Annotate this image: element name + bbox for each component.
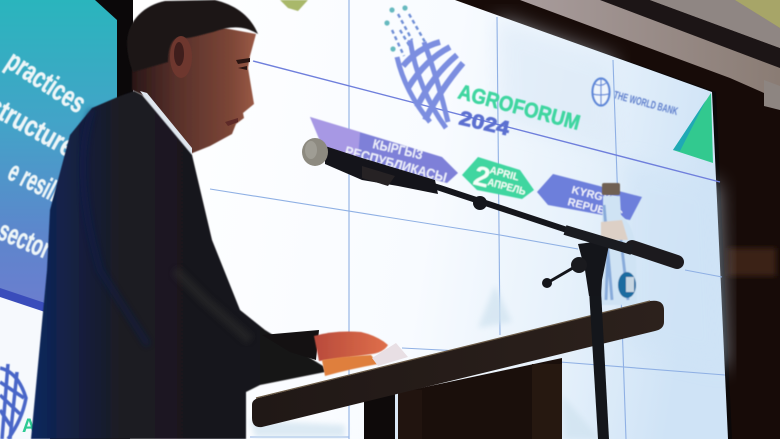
man: suit: [31, 91, 325, 439]
icon: agroforum wheat logo: [384, 5, 463, 128]
microphone on stand: [302, 138, 677, 439]
main projection screen: [130, 0, 728, 439]
faint artwork on lower screen: [250, 285, 600, 439]
icon: top logo fragment: [280, 0, 308, 11]
banner: kyrgyz republic: [537, 174, 642, 222]
banner: green date badge: [462, 157, 534, 199]
banner: green date badge: 2: [471, 160, 493, 194]
lectern: [252, 301, 664, 439]
man: far sleeve: [262, 330, 319, 360]
text: left screen copy: e resili: [3, 156, 65, 208]
left screen: [0, 0, 133, 439]
screen grid lines: [210, 0, 725, 439]
man: eye and mouth: [225, 58, 250, 126]
man: hair: [127, 0, 258, 72]
icon: green corner triangle: [673, 93, 713, 163]
water bottle: [600, 183, 637, 305]
banner: green date badge: APRIL: [488, 164, 521, 184]
mic: handle: [632, 247, 677, 262]
banner: kyrgyz respublikasy: КЫРГЫЗ: [371, 136, 424, 162]
banner: green date badge: АПРЕЛЬ: [486, 176, 527, 198]
mic: windscreen: [302, 138, 328, 166]
text: left screen copy: [0, 45, 91, 266]
person: [31, 0, 408, 439]
banner: kyrgyz republic: KYRGYZ: [570, 184, 618, 207]
text: left screen copy: practices: [0, 45, 91, 120]
text: AGROFORUM 2024: AGROFORUM: [456, 81, 582, 135]
icon: logo on left screen: [0, 364, 26, 439]
mic: tension knob: [542, 257, 587, 288]
mic: stand clamp: [578, 240, 610, 296]
mic: stand pole: [589, 290, 609, 439]
left screen: A: [22, 416, 36, 437]
mic: shaft: [322, 153, 632, 248]
icon: world bank logo: THE WORLD BANK: [612, 89, 679, 118]
man: ear: [170, 36, 192, 78]
man: near hand: [322, 355, 378, 376]
banner: kyrgyz republic: REPUBLIC: [566, 196, 624, 222]
icon: world bank logo: [592, 78, 679, 118]
mic: body: [325, 146, 438, 194]
lectern: front body: [364, 358, 562, 439]
lectern: slanted top: [252, 301, 664, 427]
man: neck and face: [132, 18, 256, 154]
man: shirt collar: [140, 91, 192, 157]
banner: kyrgyz respublikasy: РЕСПУБЛИКАСЫ: [343, 143, 449, 185]
text: AGROFORUM 2024: 2024: [457, 107, 512, 141]
banner: kyrgyz respublikasy: [310, 117, 458, 185]
paper: [372, 343, 408, 366]
man: far hand: [314, 332, 388, 361]
